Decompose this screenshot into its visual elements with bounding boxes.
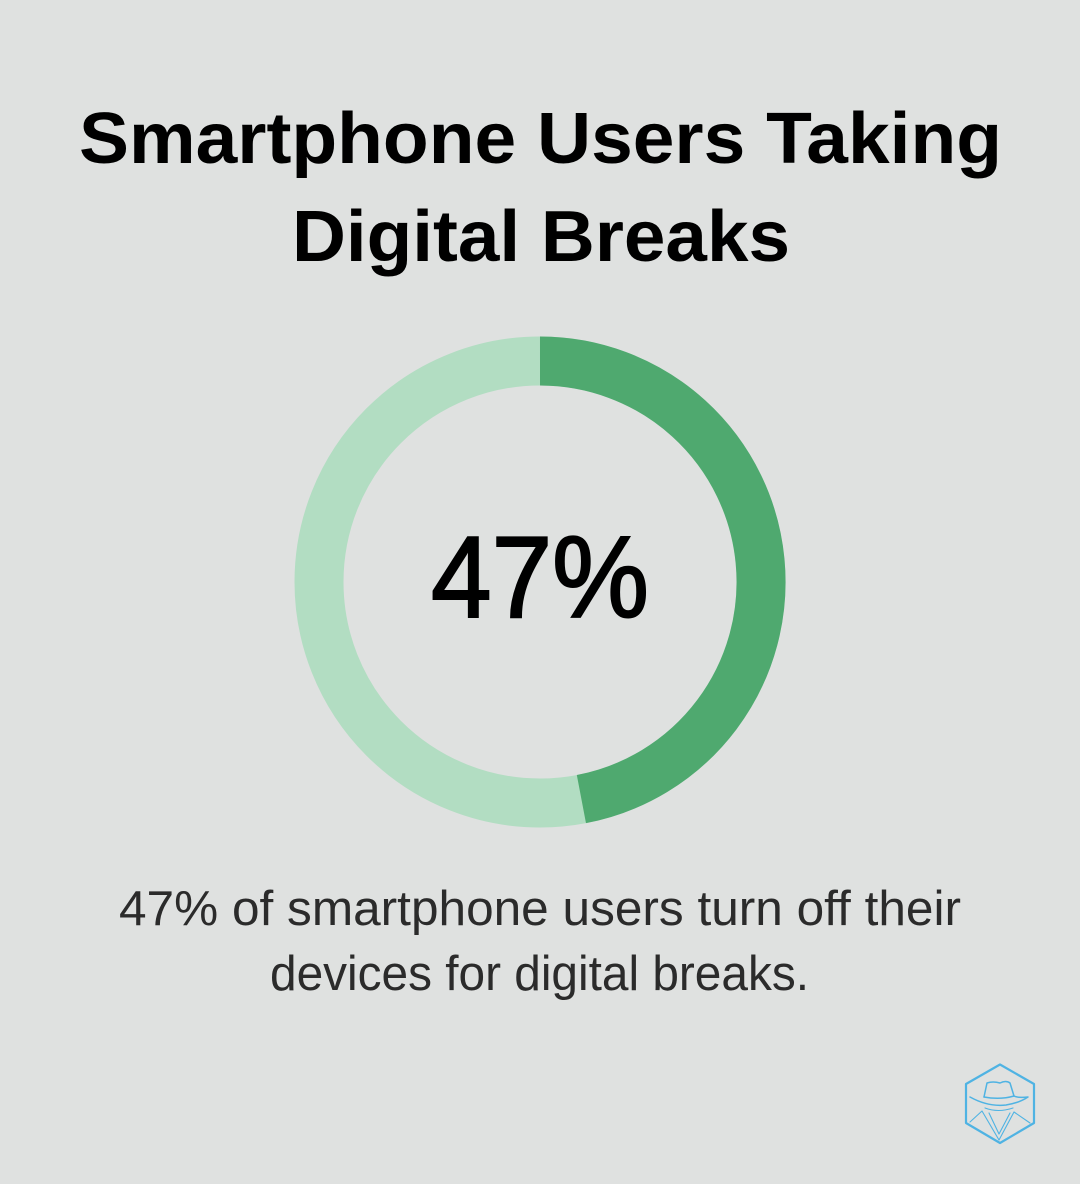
description text <box>119 882 961 1001</box>
title: Digital Breaks <box>292 197 790 277</box>
title <box>79 99 1002 277</box>
donut track <box>319 361 761 803</box>
title: Smartphone Users Taking <box>79 99 1002 179</box>
donut chart: 47% <box>319 361 761 803</box>
description text: devices for digital breaks. <box>270 947 809 1001</box>
donut value arc <box>540 361 761 799</box>
icon: logo hexagon with hat figure <box>966 1064 1034 1143</box>
description text: 47% of smartphone users turn off their <box>119 882 961 936</box>
center value: 47% <box>431 512 649 642</box>
